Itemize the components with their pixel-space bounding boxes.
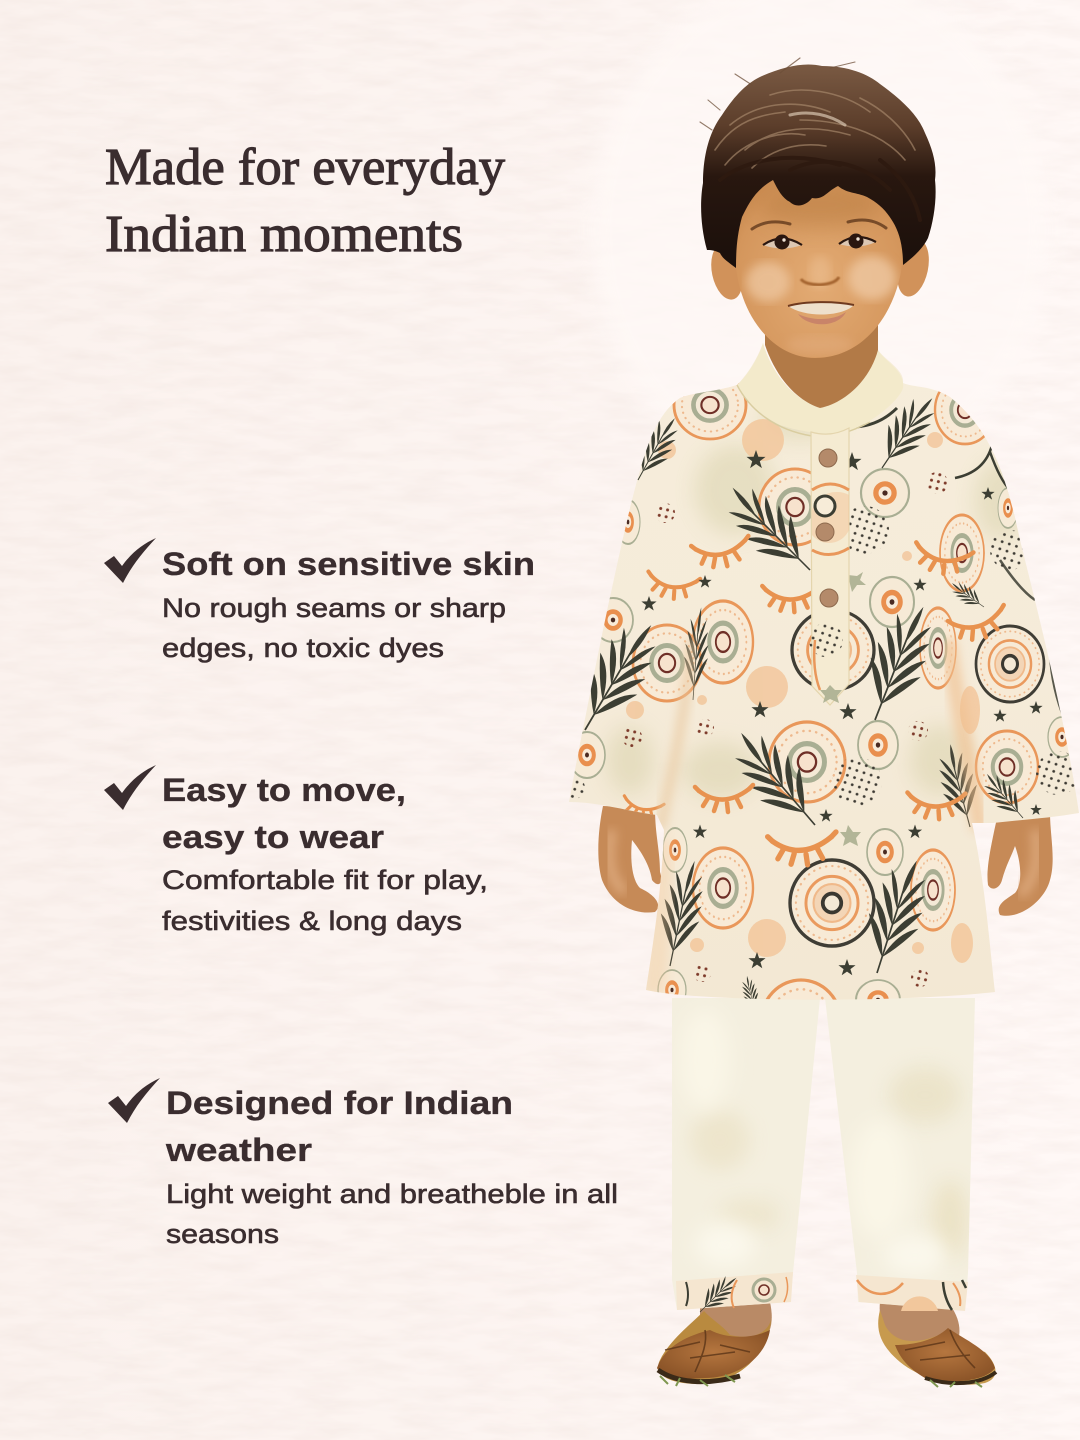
kurta (569, 343, 1079, 1000)
heading (162, 772, 406, 855)
description (162, 593, 506, 663)
heading: easy to wear (162, 819, 384, 855)
icon: check mark (104, 765, 156, 810)
description: Comfortable fit for play, (162, 865, 488, 895)
description: festivities & long days (162, 906, 462, 936)
benefit: easy to move (104, 765, 488, 936)
heading: Easy to move, (162, 772, 406, 808)
nose (801, 277, 839, 285)
description (166, 1179, 618, 1249)
icon: check mark (108, 1078, 160, 1123)
brows (752, 220, 886, 229)
description: No rough seams or sharp (162, 593, 506, 623)
eyes (763, 238, 802, 248)
printed left cuff (676, 1269, 793, 1320)
heading: Designed for Indian (166, 1085, 513, 1121)
photo: boy in printed kurta (560, 58, 1080, 1387)
title: Indian moments (105, 206, 463, 263)
description: edges, no toxic dyes (162, 633, 444, 663)
title (105, 139, 505, 263)
left trouser leg (672, 998, 820, 1308)
benefit: designed for Indian weather (108, 1078, 618, 1249)
right trouser leg (826, 998, 975, 1305)
facial features (752, 220, 886, 324)
head (700, 58, 936, 408)
heading: Soft on sensitive skin (162, 546, 535, 582)
hair (700, 58, 936, 268)
benefit: soft on sensitive skin (104, 538, 535, 663)
pants (672, 998, 975, 1312)
shoes and feet (657, 1302, 996, 1387)
face (736, 180, 902, 358)
buttons (816, 449, 838, 607)
description: Light weight and breatheble in all (166, 1179, 618, 1209)
heading (165, 1085, 513, 1168)
kurta fabric with print (569, 344, 1079, 1000)
icon: check mark (104, 538, 156, 583)
title: Made for everyday (105, 139, 505, 196)
smile (788, 302, 854, 315)
ears (707, 237, 934, 303)
collar (737, 343, 903, 437)
heading: weather (165, 1132, 312, 1168)
description: seasons (166, 1219, 279, 1249)
placket with buttons (809, 428, 849, 705)
description (162, 865, 488, 936)
hands (598, 806, 1053, 916)
neck (765, 320, 878, 408)
printed right cuff (856, 1275, 968, 1311)
